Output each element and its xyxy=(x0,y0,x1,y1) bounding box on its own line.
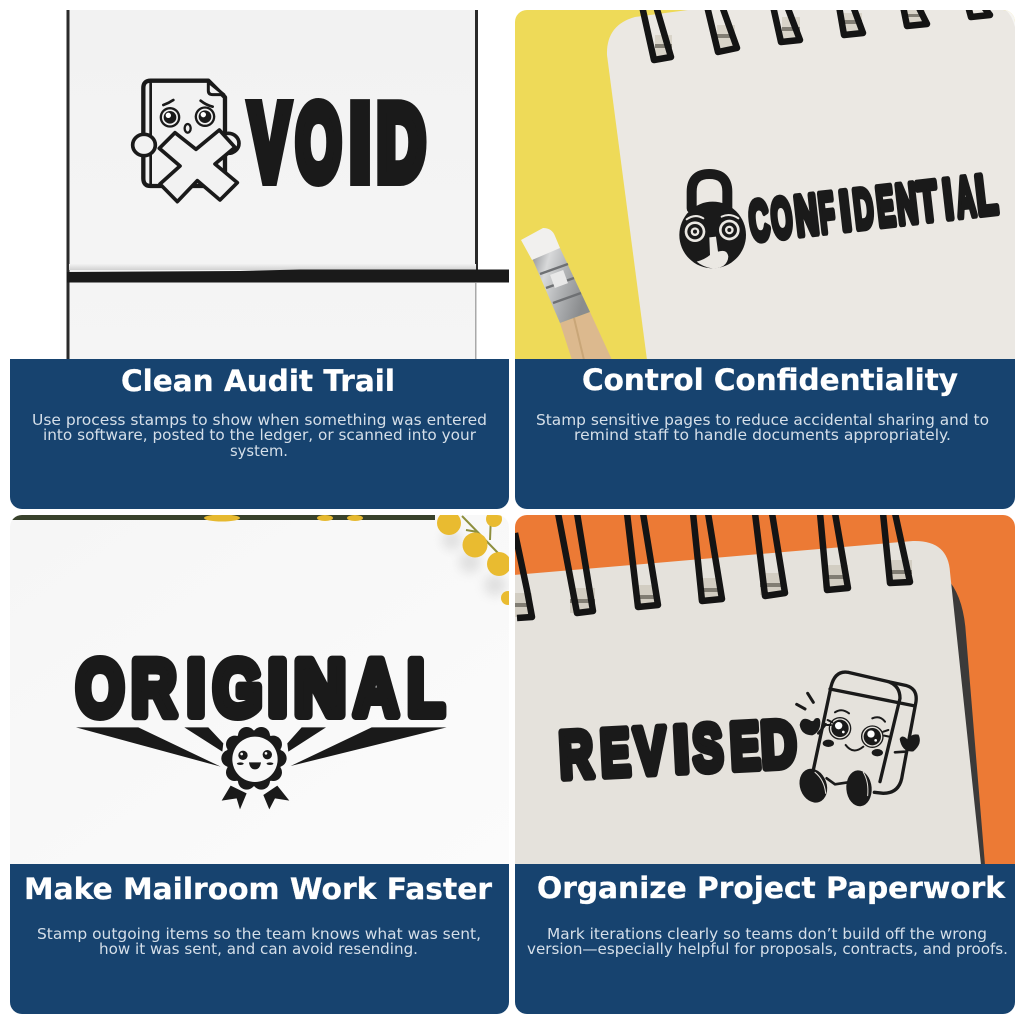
text: control confidentiality description xyxy=(536,411,989,444)
stamp word: CONFIDENTIAL: T xyxy=(914,169,941,233)
caption band xyxy=(515,864,1015,1014)
stamp word: CONFIDENTIAL: O xyxy=(768,185,796,250)
stamp word: VOID: I xyxy=(350,84,370,202)
stamp word: CONFIDENTIAL: N xyxy=(792,182,821,247)
stamp word: ORIGINAL: G xyxy=(213,643,262,732)
stamp word: ORIGINAL: I xyxy=(268,643,287,732)
stamp word: CONFIDENTIAL: E xyxy=(873,174,898,238)
stamp word: ORIGINAL: R xyxy=(131,643,176,732)
stamp word: CONFIDENTIAL: N xyxy=(893,171,921,236)
photo: orange background with notebook xyxy=(514,515,1015,865)
caption band xyxy=(10,864,509,1014)
stamp word: REVISED: I xyxy=(672,712,691,786)
text: make mailroom work faster description: Stamp outgoing items so the team knows what was sent, xyxy=(37,925,481,943)
photo: yellow background with notebook xyxy=(515,8,1016,360)
panel: control confidentiality xyxy=(515,6,1016,509)
stamp word: CONFIDENTIAL: A xyxy=(952,164,978,229)
text: clean audit trail description: into software, posted to the ledger, or scanned into your xyxy=(43,426,477,444)
text: clean audit trail description xyxy=(32,411,487,460)
stamp icon: padlock with shushing face xyxy=(679,174,746,269)
heading: make mailroom work faster: Make Mailroom Work Faster xyxy=(24,872,493,906)
stamp word: REVISED: S xyxy=(691,710,725,785)
stamp word: REVISED: E xyxy=(728,708,762,783)
stamp word: ORIGINAL: N xyxy=(294,643,346,732)
text: clean audit trail description: Use process stamps to show when something was entered xyxy=(32,411,487,429)
panel: clean audit trail xyxy=(10,10,509,509)
notebook spiral rings xyxy=(515,513,912,618)
heading: organize project paperwork: Organize Project Paperwork xyxy=(537,871,1006,905)
stamp word: ORIGINAL: I xyxy=(187,643,205,732)
stamp word: ORIGINAL: L xyxy=(407,643,444,732)
text: control confidentiality description: remind staff to handle documents appropriately. xyxy=(574,426,951,444)
photo: white page with yellow flowers xyxy=(10,515,509,652)
stamp word: REVISED: E xyxy=(598,715,632,790)
text: organize project paperwork description: Mark iterations clearly so teams don’t build off the wrong xyxy=(547,925,987,943)
stamp word: REVISED: V xyxy=(633,713,668,788)
stamp word: VOID: V xyxy=(250,84,289,202)
stamp icon: document with X xyxy=(133,81,239,202)
heading: control confidentiality: Control Confidentiality xyxy=(582,363,958,397)
photo: notebook with elastic band xyxy=(66,10,509,359)
text: organize project paperwork description: version—especially helpful for proposals, contracts, and proofs. xyxy=(527,940,1008,958)
stamp word: REVISED: D xyxy=(759,706,798,782)
stamp word: REVISED: R xyxy=(557,716,595,792)
text: make mailroom work faster description xyxy=(37,925,481,958)
stamp icon: rosette with rays xyxy=(76,727,447,809)
stamp word: ORIGINAL: A xyxy=(354,643,398,732)
text: clean audit trail description: system. xyxy=(230,442,288,460)
stamp word: CONFIDENTIAL: I xyxy=(837,179,854,242)
caption band xyxy=(515,359,1015,509)
notebook spiral rings xyxy=(642,6,990,60)
stamp word: VOID: O xyxy=(296,84,341,202)
stamp word: CONFIDENTIAL: I xyxy=(940,167,956,231)
text: organize project paperwork description xyxy=(527,925,1008,958)
caption band xyxy=(10,359,509,509)
stamp word: CONFIDENTIAL: F xyxy=(815,180,838,245)
stamp word: CONFIDENTIAL: D xyxy=(850,176,877,241)
stamp word: CONFIDENTIAL: C xyxy=(746,188,773,253)
text: make mailroom work faster description: how it was sent, and can avoid resending. xyxy=(99,940,418,958)
panel: make mailroom work faster xyxy=(10,511,515,1014)
stamp word: CONFIDENTIAL: L xyxy=(972,162,1000,227)
heading: clean audit trail: Clean Audit Trail xyxy=(121,364,395,398)
text: control confidentiality description: Stamp sensitive pages to reduce accidental sharing and to xyxy=(536,411,989,429)
stamp word: ORIGINAL: O xyxy=(76,643,124,732)
panel: organize project paperwork xyxy=(514,513,1015,1014)
stamp word: VOID: D xyxy=(377,84,425,202)
stamp icon: eraser character xyxy=(795,672,920,807)
pencil xyxy=(521,228,612,360)
